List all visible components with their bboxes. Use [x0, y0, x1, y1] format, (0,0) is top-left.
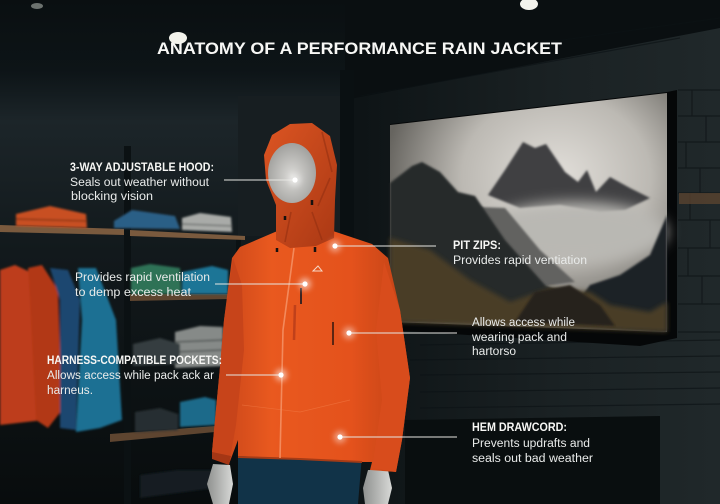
- mannequin face: [268, 143, 316, 203]
- callout: hem drawcord: Prevents updrafts and: [472, 438, 590, 450]
- accent brick: [679, 193, 720, 204]
- jacket body: [212, 222, 410, 472]
- title: ANATOMY OF A PERFORMANCE RAIN JACKET: [157, 39, 563, 58]
- wall art: mountain picture: [390, 90, 677, 346]
- callout: hood: [70, 162, 301, 203]
- callout: hem drawcord: HEM DRAWCORD:: [472, 422, 567, 434]
- callout: pack access: Allows access while: [472, 317, 575, 329]
- distant peaks: [488, 142, 650, 212]
- wooden shelf middle: [130, 294, 228, 301]
- callout: harness-compatible pockets: [47, 355, 287, 397]
- brick wall texture: [360, 18, 720, 408]
- mannequin hands: [207, 464, 392, 504]
- callout: pack access: hartorso: [472, 346, 516, 358]
- left shelving unit: [0, 146, 245, 504]
- wooden shelf top: [0, 225, 124, 235]
- callout: ventilation: Provides rapid ventilation: [75, 272, 210, 284]
- callout: pack access: [343, 317, 575, 358]
- chest pocket zip: [300, 288, 302, 304]
- callout: harness-compatible pockets: HARNESS-COMPATIBLE POCKETS:: [47, 355, 222, 367]
- left mountain: [390, 162, 580, 322]
- logo: [313, 266, 322, 271]
- rain jacket: [212, 123, 410, 472]
- front zip: [280, 248, 294, 458]
- callout: pit zips: PIT ZIPS:: [453, 240, 501, 252]
- ceiling spotlights: [31, 0, 538, 44]
- hood: [264, 123, 337, 248]
- callout: pack access: wearing pack and: [471, 332, 567, 344]
- hem seam: [242, 400, 350, 412]
- callout: pit zips: Provides rapid ventiation: [453, 255, 587, 267]
- foreground hills: [390, 238, 667, 332]
- callout: hem drawcord: seals out bad weather: [472, 453, 593, 465]
- callout: harness-compatible pockets: Allows access while pack ack ar: [47, 370, 214, 382]
- middle ridge: [478, 207, 575, 292]
- hanging jackets on rail: [0, 265, 122, 432]
- callout: hem drawcord: [334, 422, 593, 465]
- left sleeve shading: [212, 258, 244, 464]
- callout: harness-compatible pockets: harneus.: [47, 385, 93, 397]
- cabinet: [405, 416, 660, 504]
- right cliff: [560, 215, 667, 332]
- callout: hood: 3-WAY ADJUSTABLE HOOD:: [70, 162, 214, 174]
- callout: hood: blocking vision: [71, 191, 153, 203]
- callout: ventilation: to demp excess heat: [75, 287, 192, 299]
- cuff: [212, 452, 231, 465]
- hood folds: [285, 132, 332, 242]
- right sleeve shading: [372, 262, 410, 472]
- callout: pit zips: [329, 240, 587, 267]
- cloud band: [483, 202, 667, 262]
- callout: ventilation: [75, 272, 311, 299]
- callout: hood: Seals out weather without: [70, 177, 210, 189]
- drawcord toggles: [277, 200, 315, 252]
- pants: [238, 455, 362, 504]
- wooden shelf lower: [110, 426, 215, 442]
- folded clothes stacks: [16, 206, 232, 498]
